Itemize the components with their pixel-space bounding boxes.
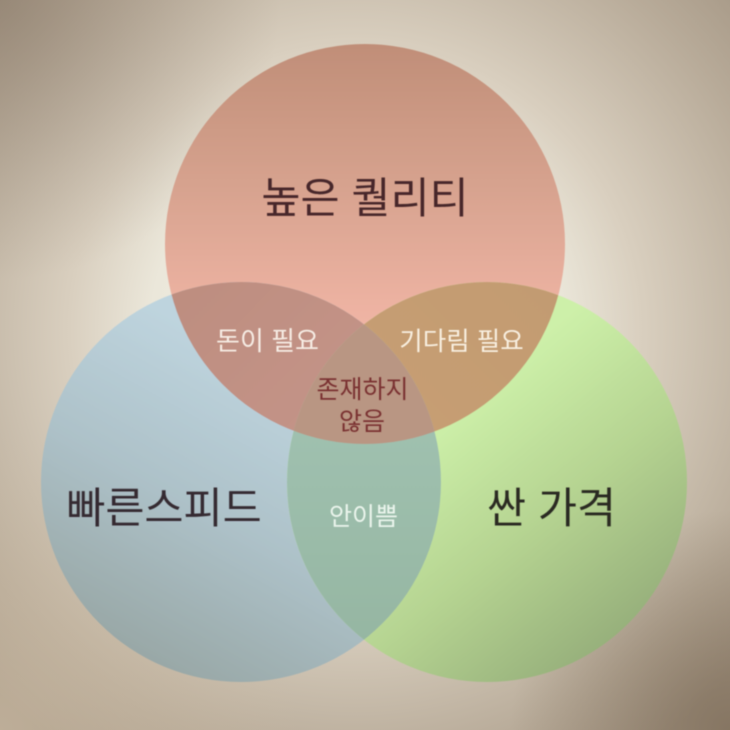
label: low price: 싼 가격	[487, 486, 616, 533]
overlap: quality and speed	[171, 281, 364, 431]
overlap: all three	[294, 324, 434, 444]
circle: low price	[287, 282, 687, 682]
label: does not exist: 않음	[339, 408, 385, 436]
label: fast speed: 빠른스피드	[66, 486, 262, 533]
circle: high quality	[165, 44, 565, 444]
label: high quality: 높은 퀄리티	[261, 176, 469, 223]
venn circles	[41, 44, 687, 682]
label: needs money: 돈이 필요	[216, 326, 319, 356]
label: does not exist: 존재하지	[316, 376, 409, 404]
label: needs waiting: 기다림 필요	[399, 328, 524, 356]
circle: fast speed	[41, 282, 441, 682]
overlap: speed and price	[286, 430, 442, 640]
label: not pretty: 안이쁨	[329, 503, 398, 531]
label: does not exist	[316, 376, 409, 436]
overlap: quality and price	[364, 282, 558, 432]
